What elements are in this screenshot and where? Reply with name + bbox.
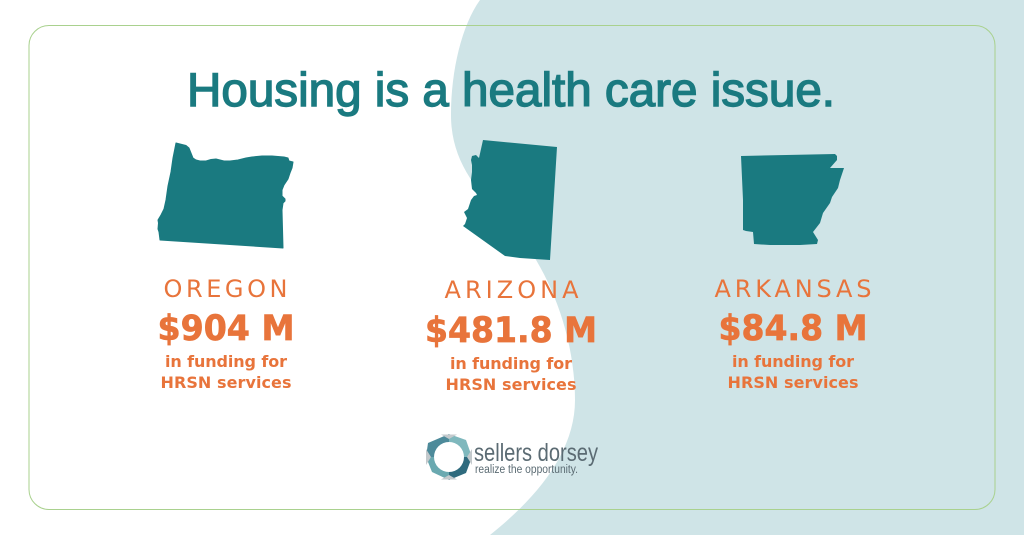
logo tagline: realize the opportunity.	[475, 464, 578, 476]
panel: Arizona	[425, 140, 597, 394]
icon: Arizona map	[463, 140, 557, 260]
description: Arizona: in funding for	[450, 354, 572, 373]
label: Oregon: OREGON	[164, 275, 288, 303]
panel: Arkansas: HRSN services	[728, 373, 858, 392]
icon: Oregon map	[158, 143, 293, 248]
background teal shape	[451, 0, 1024, 535]
logo mark	[426, 434, 472, 480]
title: Housing is a health care issue.	[187, 64, 835, 117]
logo: Sellers Dorsey	[426, 434, 598, 480]
amount: Arkansas: $84.8 M	[718, 309, 868, 349]
panel: Arizona: HRSN services	[446, 375, 576, 394]
label: Arizona: ARIZONA	[444, 276, 579, 304]
amount: Arizona: $481.8 M	[425, 311, 597, 351]
description: Oregon: in funding for	[165, 352, 287, 371]
panel: Arkansas	[714, 154, 872, 392]
logo wordmark: sellers dorsey	[474, 439, 598, 467]
amount: Oregon: $904 M	[158, 309, 294, 349]
description: Arkansas: in funding for	[732, 352, 854, 371]
panel: Oregon	[158, 143, 294, 392]
panel: Oregon: HRSN services	[160, 373, 292, 392]
icon: Arkansas map	[741, 154, 844, 245]
label: Arkansas: ARKANSAS	[714, 275, 872, 303]
